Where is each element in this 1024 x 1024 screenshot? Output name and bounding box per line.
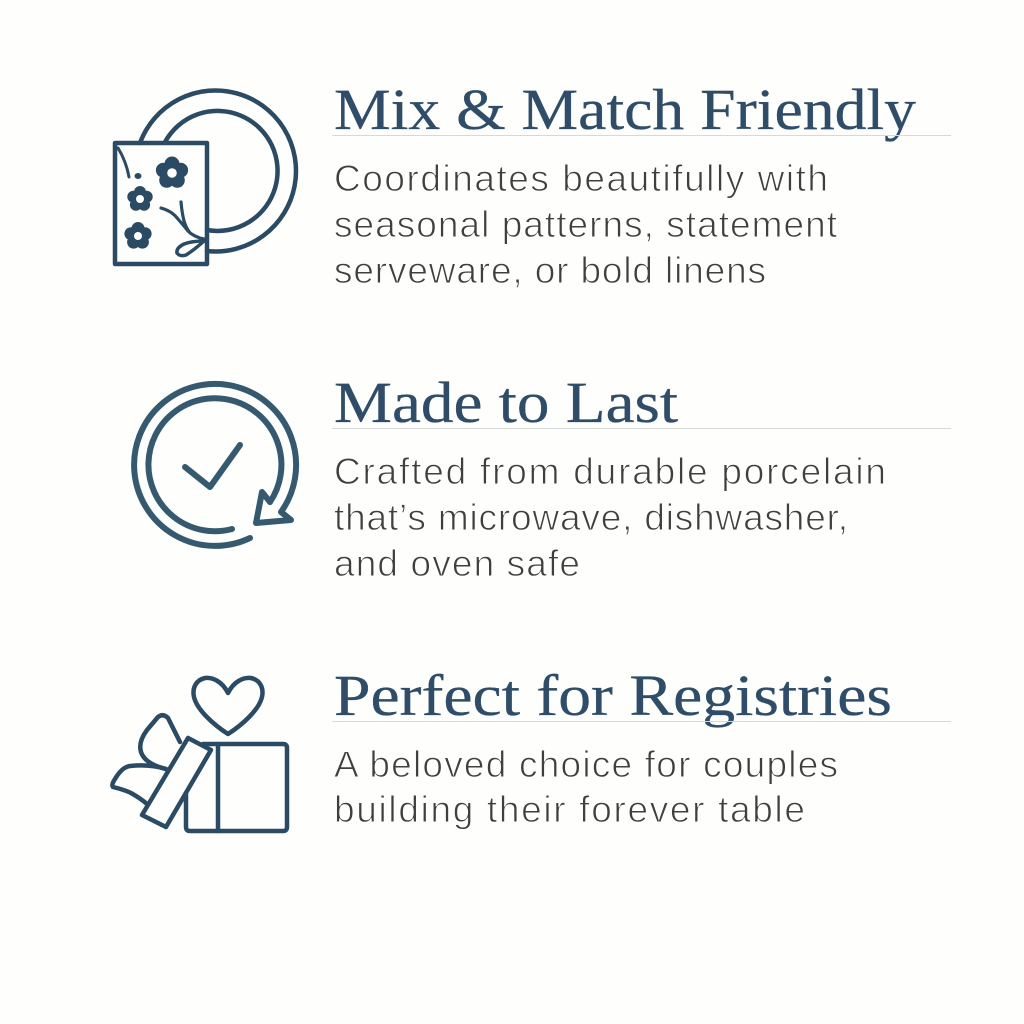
card corner stem [118, 148, 129, 177]
text: Perfect for Registries description: building their forever table [334, 789, 805, 830]
small dot [135, 174, 141, 178]
branches [161, 202, 204, 239]
plate inner ring [165, 111, 278, 231]
inner arc [148, 398, 281, 531]
heading: Mix and Match Friendly: Mix & Match Friendly [334, 77, 916, 142]
heart [193, 678, 263, 734]
box [186, 744, 287, 831]
check mark [185, 445, 240, 487]
text: Mix and Match description [334, 158, 838, 291]
icon: plate with floral card [115, 90, 296, 264]
middle flower [127, 186, 153, 211]
heading: Perfect for Registries: Perfect for Registries [334, 663, 892, 728]
outer arc with arrowhead [134, 384, 296, 546]
heading: Made to Last: Made to Last [334, 370, 678, 435]
text: Made to Last description: that’s microwave, dishwasher, [334, 497, 848, 538]
floral card [115, 143, 207, 264]
text: Mix and Match description: serveware, or bold linens [334, 250, 766, 291]
text: Made to Last description: Crafted from durable porcelain [334, 451, 886, 492]
lower bow [112, 765, 166, 804]
plate outer rim [140, 90, 296, 251]
text: Made to Last description [334, 451, 886, 584]
text: Mix and Match description: seasonal patterns, statement [334, 204, 838, 245]
icon: open gift box with heart [112, 678, 287, 831]
lower flower [124, 222, 152, 249]
upper bow [140, 715, 180, 769]
box divider [216, 744, 220, 831]
lid [142, 738, 211, 827]
text: Made to Last description: and oven safe [334, 543, 580, 584]
icon: circular arrow with check [134, 384, 296, 546]
large flower [156, 156, 188, 188]
leaf bud [177, 241, 204, 256]
text: Perfect for Registries description [334, 744, 838, 830]
text: Perfect for Registries description: A beloved choice for couples [334, 744, 838, 785]
text: Mix and Match description: Coordinates beautifully with [334, 158, 828, 199]
